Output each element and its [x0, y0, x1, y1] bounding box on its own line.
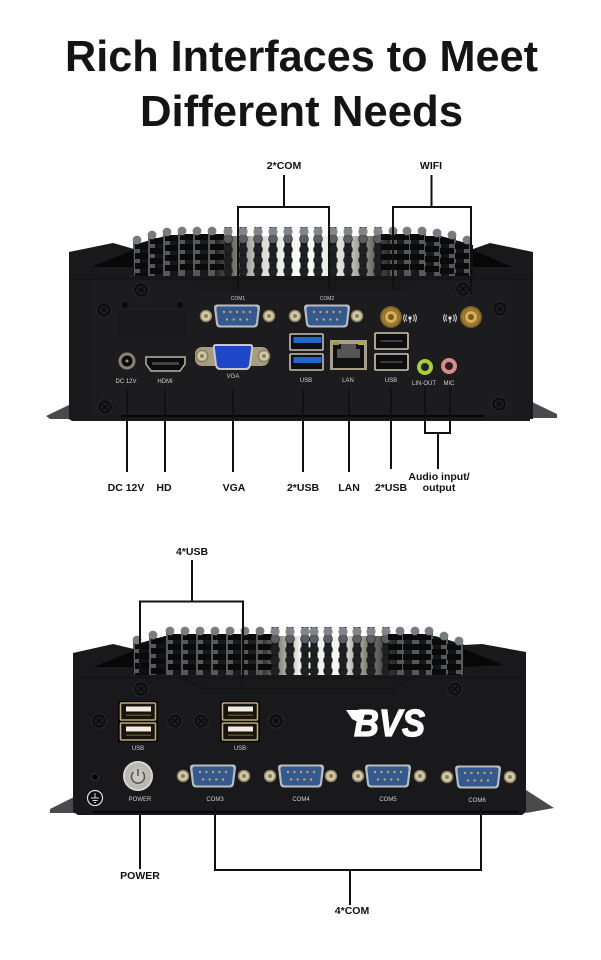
callout: POWER — [120, 805, 160, 882]
port: DC jack — [115, 352, 137, 385]
callout: WIFI: WIFI — [420, 160, 442, 172]
port: audio: LIN-OUT — [412, 381, 436, 387]
callout: 2*USB — [287, 389, 319, 494]
callout: LAN — [338, 389, 360, 494]
port: antennas — [380, 306, 482, 328]
port: LAN: LAN — [342, 378, 354, 384]
callout: 2*COM — [238, 160, 329, 289]
port: COM3: COM3 — [206, 797, 224, 803]
device: front panel with fins and ports — [46, 227, 557, 421]
callout: WIFI — [393, 160, 471, 295]
button: power: POWER — [129, 797, 152, 803]
chassis — [69, 243, 533, 421]
port: audio: MIC — [444, 381, 455, 387]
callout: 2*USB: 2*USB — [287, 482, 319, 494]
mounting brackets — [46, 403, 73, 419]
port: COM1 — [200, 296, 275, 328]
button: power — [123, 761, 153, 803]
port: COM6 — [441, 766, 516, 804]
title — [65, 32, 538, 136]
callout: HD: HD — [156, 482, 172, 494]
port: VGA — [195, 345, 270, 380]
port: USB group right: USB — [234, 746, 246, 752]
callout: 2*COM: 2*COM — [267, 160, 301, 172]
port: COM2: COM2 — [320, 296, 334, 302]
callout: 4*COM: 4*COM — [335, 905, 369, 917]
panel screws — [97, 282, 507, 414]
callout: VGA: VGA — [223, 482, 246, 494]
port: COM6: COM6 — [468, 798, 486, 804]
callout: 4*USB: 4*USB — [176, 546, 208, 558]
callout: POWER: POWER — [120, 870, 160, 882]
icon: ground — [88, 774, 102, 806]
callout: DC 12V — [108, 389, 144, 494]
callout: HD — [156, 389, 172, 494]
port: USB group left — [118, 701, 158, 752]
port: COM5: COM5 — [379, 797, 397, 803]
heat sink fins — [133, 227, 473, 288]
port: COM3 — [177, 764, 250, 803]
device: rear panel with fins and ports — [50, 627, 554, 815]
port: COM4 — [264, 764, 337, 803]
callout: 2*USB second — [375, 387, 407, 494]
callout: LAN: LAN — [338, 482, 360, 494]
callout: 4*USB — [140, 546, 243, 683]
port: COM4: COM4 — [292, 797, 310, 803]
callout: audio input/output — [408, 387, 470, 494]
panel screws — [92, 682, 462, 728]
port: HDMI: HDMI — [157, 379, 173, 385]
port: COM1: COM1 — [231, 296, 245, 302]
title: Different Needs — [140, 87, 463, 136]
callout: 2*USB second: 2*USB — [375, 482, 407, 494]
port: USB group left: USB — [132, 746, 144, 752]
port: COM5 — [352, 764, 426, 803]
port: audio — [412, 358, 457, 387]
callout: DC 12V: DC 12V — [108, 482, 144, 494]
logo: BVS: BVS — [354, 703, 425, 745]
port: USB 3: USB — [300, 378, 312, 384]
heat sink fins — [133, 627, 465, 689]
title: Rich Interfaces to Meet — [65, 32, 538, 81]
port: LAN — [330, 340, 367, 384]
callout: VGA — [223, 389, 246, 494]
port: HDMI — [146, 357, 185, 385]
callout: audio input/output: Audio input/ — [408, 471, 470, 483]
port: USB 2: USB — [385, 378, 397, 384]
callout: 4*COM — [215, 806, 481, 917]
callout: audio input/output: output — [423, 482, 456, 494]
port: DC jack: DC 12V — [115, 379, 137, 385]
port: USB 3 — [290, 334, 323, 384]
port: COM2 — [289, 296, 363, 328]
chassis — [73, 644, 526, 815]
port: USB group right — [220, 701, 260, 752]
mounting brackets — [50, 797, 74, 813]
port: USB 2 — [375, 333, 408, 384]
port: VGA: VGA — [227, 374, 239, 380]
